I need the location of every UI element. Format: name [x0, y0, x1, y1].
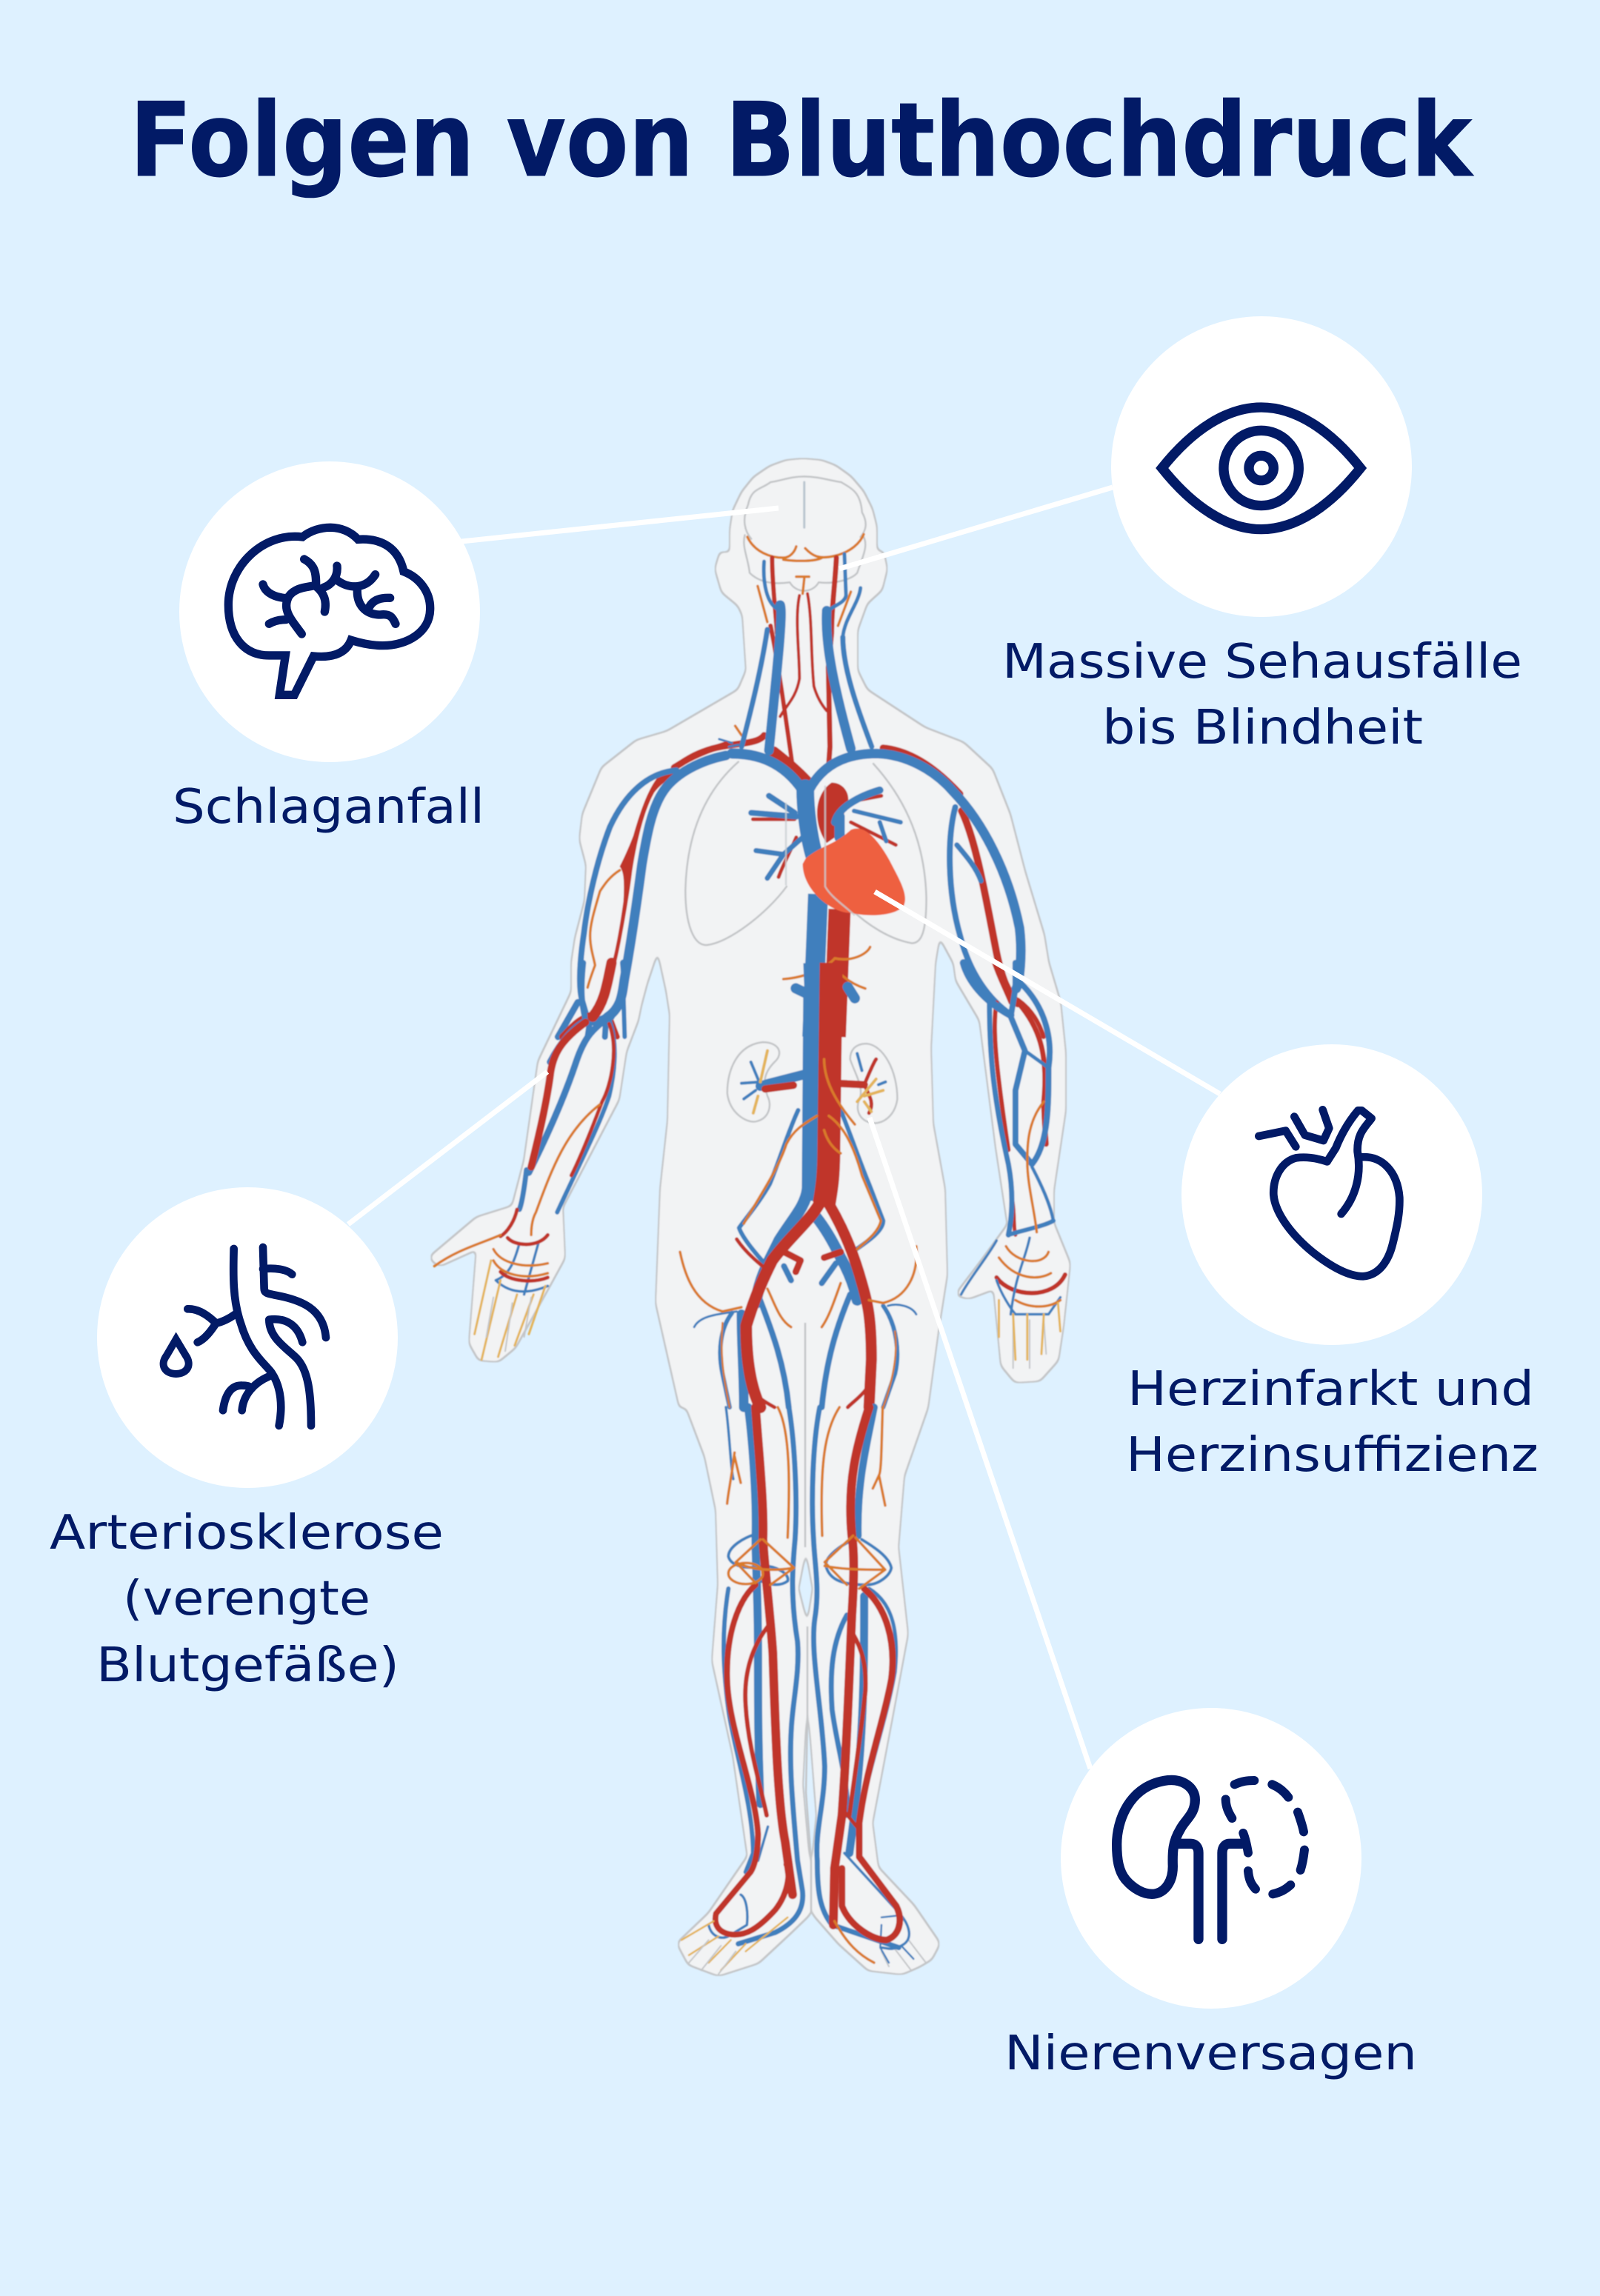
label	[1126, 1362, 1539, 1483]
left leg veins	[709, 1407, 803, 1943]
circle	[1181, 1044, 1482, 1345]
red aortic arch	[674, 735, 1044, 1037]
connector: kidney	[870, 1118, 1090, 1769]
kidneys	[727, 1042, 897, 1123]
circle	[97, 1187, 398, 1488]
connector: heart	[875, 892, 1220, 1094]
label: Arteriosklerose	[50, 1506, 444, 1561]
heart	[803, 829, 905, 915]
icon: heart	[1259, 1109, 1399, 1276]
head arteries	[736, 534, 864, 735]
label	[1002, 635, 1522, 755]
left forearm and hand vessels	[496, 963, 624, 1295]
label: Herzinfarkt und	[1127, 1362, 1534, 1417]
orange small arteries pelvis	[680, 1059, 916, 1407]
aorta and iliac arteries	[737, 963, 871, 1407]
icon: eye	[1162, 407, 1361, 530]
vena cava and iliac veins	[694, 963, 916, 1407]
body silhouette	[430, 459, 1070, 1975]
label: Herzinsuffizienz	[1126, 1428, 1539, 1483]
left leg arteries	[716, 1407, 793, 1935]
human body circulatory system	[430, 459, 1070, 1975]
renal vessels	[760, 1075, 803, 1086]
pulmonary vessels	[753, 795, 896, 877]
circle	[179, 461, 480, 762]
label	[50, 1506, 444, 1693]
connector: eye	[839, 487, 1113, 569]
label: Massive Sehausfälle	[1002, 635, 1522, 690]
label: (verengte	[123, 1572, 370, 1626]
brain outline	[744, 476, 866, 591]
panel: Herzinfarkt	[1126, 1044, 1539, 1483]
circle	[1061, 1708, 1361, 2009]
label: Nierenversagen	[1004, 2026, 1417, 2081]
icon: brain	[228, 527, 430, 695]
abdomen, pelvis, forearm vessels	[434, 963, 1065, 1407]
leg divider lines	[805, 1323, 811, 1914]
panel: Sehausfälle	[1002, 316, 1522, 755]
panel: Schlaganfall	[173, 461, 484, 835]
lungs	[685, 762, 927, 945]
panel: Nierenversagen	[1004, 1708, 1417, 2081]
diaphragm vessels	[784, 947, 870, 989]
icon: kidney failure	[1117, 1780, 1304, 1939]
right leg arteries	[833, 1407, 900, 1940]
right forearm and hand vessels	[994, 963, 1065, 1293]
title: Folgen von Bluthochdruck	[130, 81, 1474, 200]
label: Blutgefäße)	[96, 1638, 399, 1693]
right leg veins	[813, 1407, 913, 1963]
circle	[1111, 316, 1412, 617]
label: bis Blindheit	[1102, 701, 1423, 755]
blue jugular and subclavian veins	[719, 554, 1021, 1015]
connector: arteries	[348, 1072, 547, 1224]
label: Schlaganfall	[173, 780, 484, 835]
descending aorta and vena cava in chest	[813, 894, 839, 1037]
icon: narrowed blood vessels	[164, 1247, 326, 1426]
leg vessels	[681, 1407, 926, 1974]
torso and head vessels	[674, 476, 1044, 1037]
left upper arm vessels	[558, 744, 726, 1037]
panel: Arteriosklerose	[50, 1187, 444, 1693]
connector: brain	[461, 508, 779, 541]
